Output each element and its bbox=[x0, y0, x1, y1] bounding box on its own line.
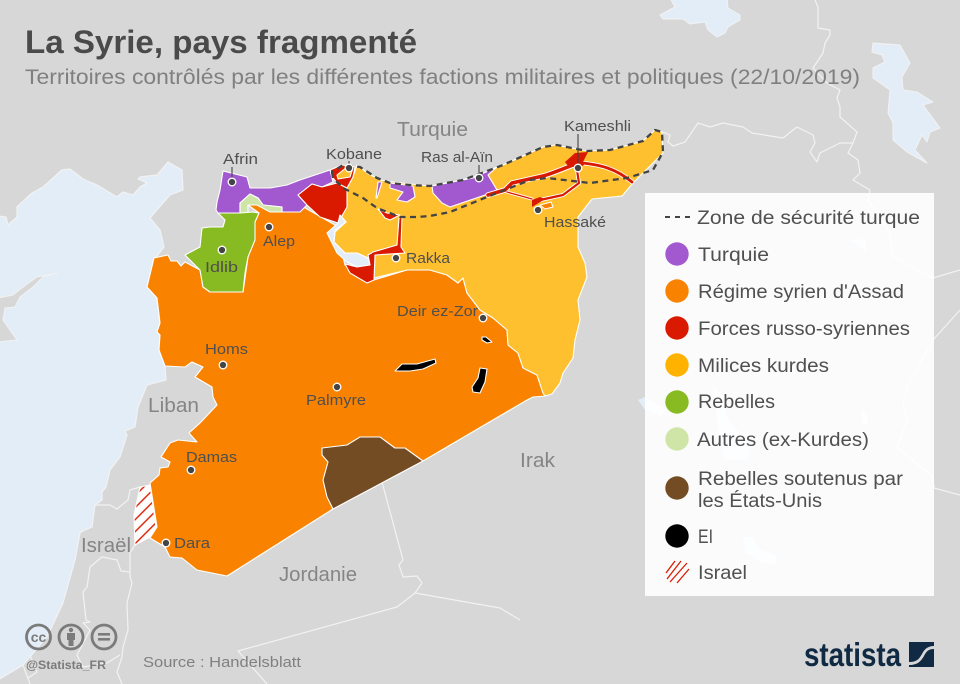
label: Idlib: Idlib bbox=[205, 259, 238, 276]
Creative Commons icons bbox=[26, 625, 116, 649]
legend: rebels bbox=[665, 390, 775, 414]
label: Homs: Homs bbox=[205, 341, 248, 358]
city dots bbox=[162, 164, 582, 547]
label: Kobane: Kobane bbox=[326, 146, 382, 163]
city markers and labels bbox=[162, 118, 631, 552]
territory: regime pocket near Hassaké bbox=[540, 202, 553, 209]
territory: Russo-Syrian forces, Manbij bbox=[298, 183, 347, 223]
territory: Islamic State pocket north bbox=[482, 337, 492, 343]
title: La Syrie, pays fragmenté bbox=[25, 24, 417, 60]
territory: Kobane pocket bbox=[337, 167, 353, 179]
territory: Israel-occupied Golan bbox=[134, 485, 156, 545]
territory: Euphrates lake bbox=[327, 215, 370, 267]
lake top centre bbox=[660, 0, 740, 37]
source: Source : Handelsblatt bbox=[143, 654, 302, 671]
territory: others, ex-Kurds bbox=[240, 194, 282, 213]
legend: Turquie bbox=[665, 242, 769, 266]
Turkish safe zone dashed line bbox=[332, 130, 663, 217]
legend: others bbox=[665, 427, 869, 451]
territory: Turkey, Tal Abyad bbox=[390, 183, 415, 202]
country: Jordanie: Jordanie bbox=[279, 564, 357, 586]
map of Syria territories bbox=[134, 130, 663, 576]
territory: rebels, Idlib bbox=[185, 212, 259, 292]
country: Irak: Irak bbox=[520, 450, 556, 472]
cyprus bbox=[0, 273, 57, 342]
Russo-Syrian road network around Kameshli bbox=[488, 152, 632, 207]
legend: Israel: Israel bbox=[698, 563, 747, 584]
legend: Islamic State: EI bbox=[698, 527, 713, 548]
label: Alep: Alep bbox=[263, 233, 295, 250]
legend: Islamic State bbox=[665, 524, 713, 548]
label: Afrin: Afrin bbox=[223, 151, 258, 168]
territory: US-backed rebels bbox=[322, 437, 423, 509]
territory: Russo-Syrian forces, small strip bbox=[378, 209, 400, 220]
territory: Islamic State pocket west bbox=[395, 359, 436, 371]
social handle: @Statista_FR bbox=[26, 658, 106, 672]
territory: Assad regime bbox=[147, 205, 545, 576]
legend: Russo-Syrian forces: Forces russo-syriennes bbox=[698, 319, 910, 340]
legend: Assad regime: Régime syrien d'Assad bbox=[698, 282, 904, 303]
legend: Kurdish militias bbox=[665, 353, 829, 377]
label: Rakka: Rakka bbox=[406, 250, 451, 267]
country: Israël: Israël bbox=[81, 535, 131, 557]
lakes behind the legend bbox=[638, 239, 868, 565]
country labels bbox=[81, 119, 556, 586]
territory: Turkey, sliver bbox=[376, 182, 382, 198]
territory: Islamic State pocket south bbox=[472, 368, 487, 393]
label: Palmyre: Palmyre bbox=[306, 392, 366, 409]
label: Hassaké: Hassaké bbox=[544, 214, 606, 231]
territory: Russo-Syrian forces, Kobane bbox=[330, 165, 355, 188]
legend: Israel bbox=[666, 561, 747, 584]
territory: Turkey, Ras al-Ain bbox=[432, 167, 497, 207]
legend: US-backed rebels: les États-Unis bbox=[698, 491, 822, 512]
country: Liban: Liban bbox=[148, 395, 199, 417]
lake right bbox=[872, 43, 940, 163]
label: Deir ez-Zor: Deir ez-Zor bbox=[397, 303, 478, 320]
leader lines bbox=[232, 134, 578, 180]
territory: Turkey, Afrin to Azaz bbox=[216, 170, 333, 213]
label: Dara: Dara bbox=[174, 535, 211, 552]
Creative Commons icons: cc bbox=[31, 629, 46, 645]
legend: US-backed rebels bbox=[665, 469, 904, 512]
legend: safe zone: Zone de sécurité turque bbox=[697, 208, 920, 229]
subtitle: Territoires contrôlés par les différentes factions militaires et politiques (22/10/2019) bbox=[25, 66, 860, 89]
label: Damas: Damas bbox=[186, 449, 237, 466]
territory: Kurdish militias bbox=[334, 130, 663, 396]
legend: Kurdish militias: Milices kurdes bbox=[698, 356, 829, 377]
label: Kameshli: Kameshli bbox=[564, 118, 631, 135]
country: Turquie: Turquie bbox=[397, 119, 468, 141]
territory: Russo-Syrian forces, Rakka corridor bbox=[345, 217, 405, 283]
legend: others: Autres (ex-Kurdes) bbox=[697, 430, 869, 451]
Statista logo: statista bbox=[804, 636, 902, 673]
legend: rebels: Rebelles bbox=[698, 392, 775, 413]
label: Ras al-Aïn: Ras al-Aïn bbox=[421, 149, 493, 166]
legend: US-backed rebels: Rebelles soutenus par bbox=[698, 469, 904, 490]
legend: Turquie: Turquie bbox=[698, 245, 769, 266]
mediterranean sea bbox=[0, 162, 183, 680]
legend panel bbox=[645, 193, 934, 596]
